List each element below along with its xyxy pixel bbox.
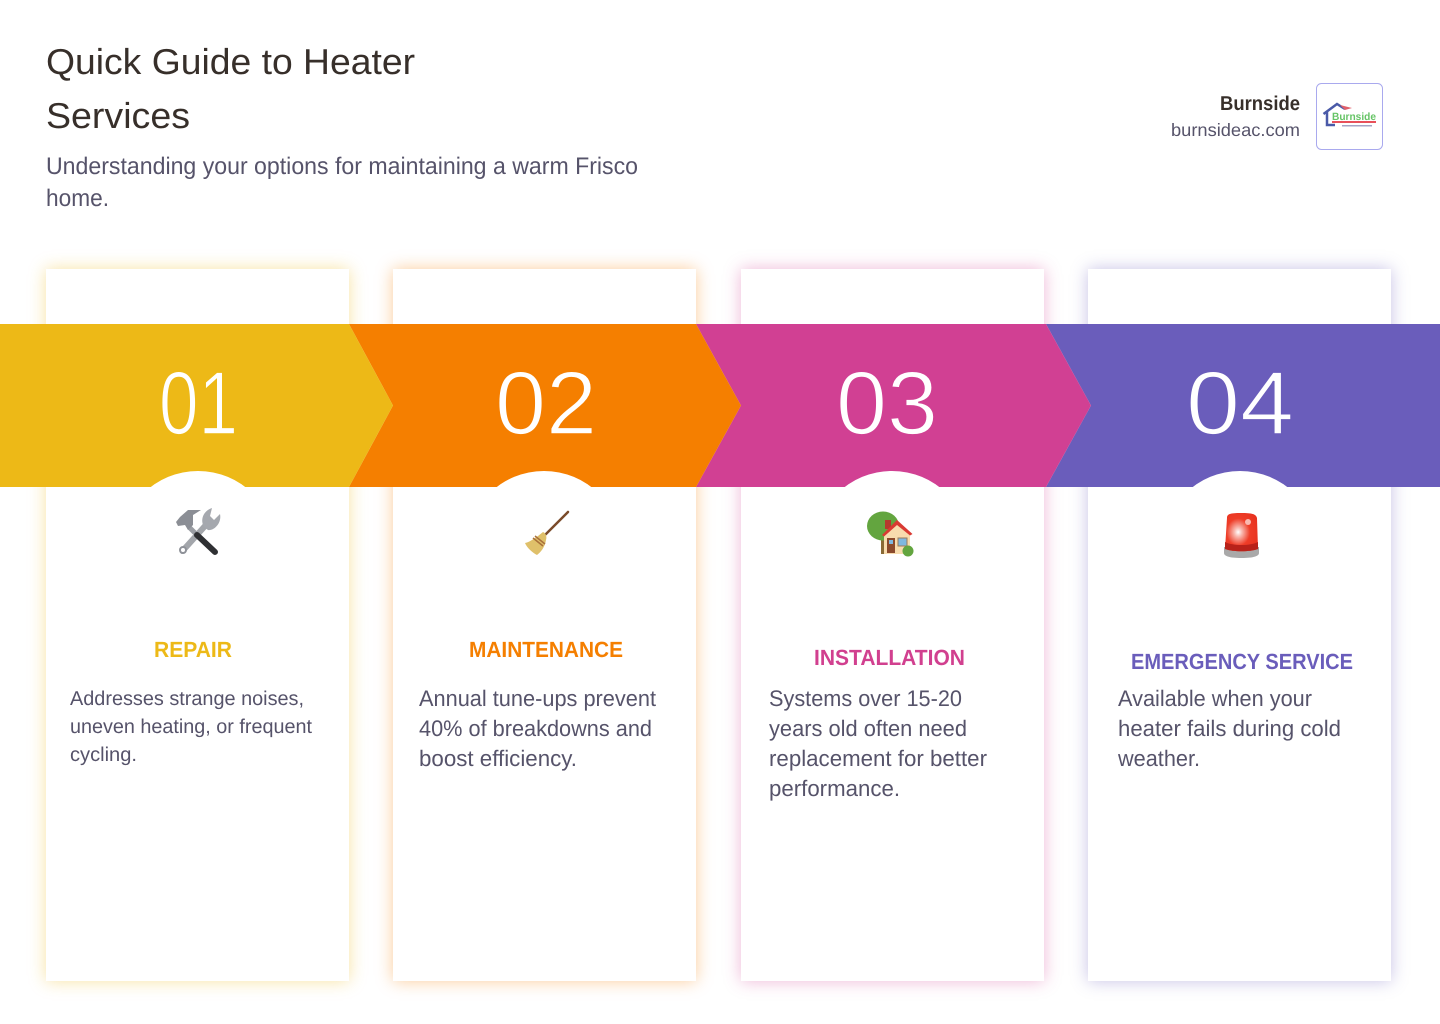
text: maintenance description: 40% of breakdowns and [419,716,652,741]
panel: emergency service card [1088,269,1391,981]
text: emergency service description: heater fails during cold [1118,716,1341,741]
brand name and website: Burnside [1220,93,1300,115]
logo: Burnside [1332,111,1376,123]
title: Services [46,95,190,136]
text: maintenance description: Annual tune-ups prevent [419,686,657,711]
arrow: step 03: 03 [836,354,938,454]
text: repair description: cycling. [70,744,137,766]
arrow: step 04 [1046,324,1440,487]
brand name and website: burnsideac.com [1171,120,1300,140]
arrow: step 03 [696,324,1091,487]
text: installation description [769,686,987,801]
icon backdrop circle [814,471,970,627]
logo [1316,84,1382,150]
icon: hammer and wrench [176,508,220,553]
text: repair description [70,688,312,766]
text: repair description: uneven heating, or frequent [70,716,312,738]
icon: broom [525,512,568,555]
text: installation description: replacement for better [769,746,987,771]
arrow: step 04: 04 [1186,354,1294,454]
subtitle [46,153,638,212]
icon: house with tree [867,512,914,556]
title [46,41,415,136]
arrow: step 02 [349,324,741,487]
panel: repair card [46,269,349,981]
subtitle: Understanding your options for maintaining a warm Frisco [46,153,638,180]
label: maintenance: MAINTENANCE [469,637,623,662]
panel: maintenance card [393,269,696,981]
text: installation description: Systems over 15-20 [769,686,962,711]
text: emergency service description: Available when your [1118,686,1312,711]
label: repair: REPAIR [154,637,232,662]
label: emergency service: EMERGENCY SERVICE [1131,649,1353,674]
arrow: step 01: 01 [159,354,238,454]
icon: red siren [1224,513,1259,558]
text: maintenance description: boost efficiency. [419,746,577,771]
text: emergency service description: weather. [1117,746,1200,771]
text: maintenance description [419,686,657,771]
subtitle: home. [46,185,109,212]
text: installation description: years old often need [769,716,967,741]
text: repair description: Addresses strange noises, [70,688,304,710]
icon backdrop circle [466,471,622,627]
title: Quick Guide to Heater [46,41,415,82]
icon backdrop circle [1162,471,1318,627]
brand name and website [1171,93,1300,140]
icon backdrop circle [120,471,276,627]
arrow: step 01 [0,324,393,487]
text: installation description: performance. [769,776,900,801]
panel: installation card [741,269,1044,981]
arrow: step 02: 02 [495,354,597,454]
label: installation: INSTALLATION [814,645,965,670]
text: emergency service description [1117,686,1341,771]
header [46,41,1383,212]
